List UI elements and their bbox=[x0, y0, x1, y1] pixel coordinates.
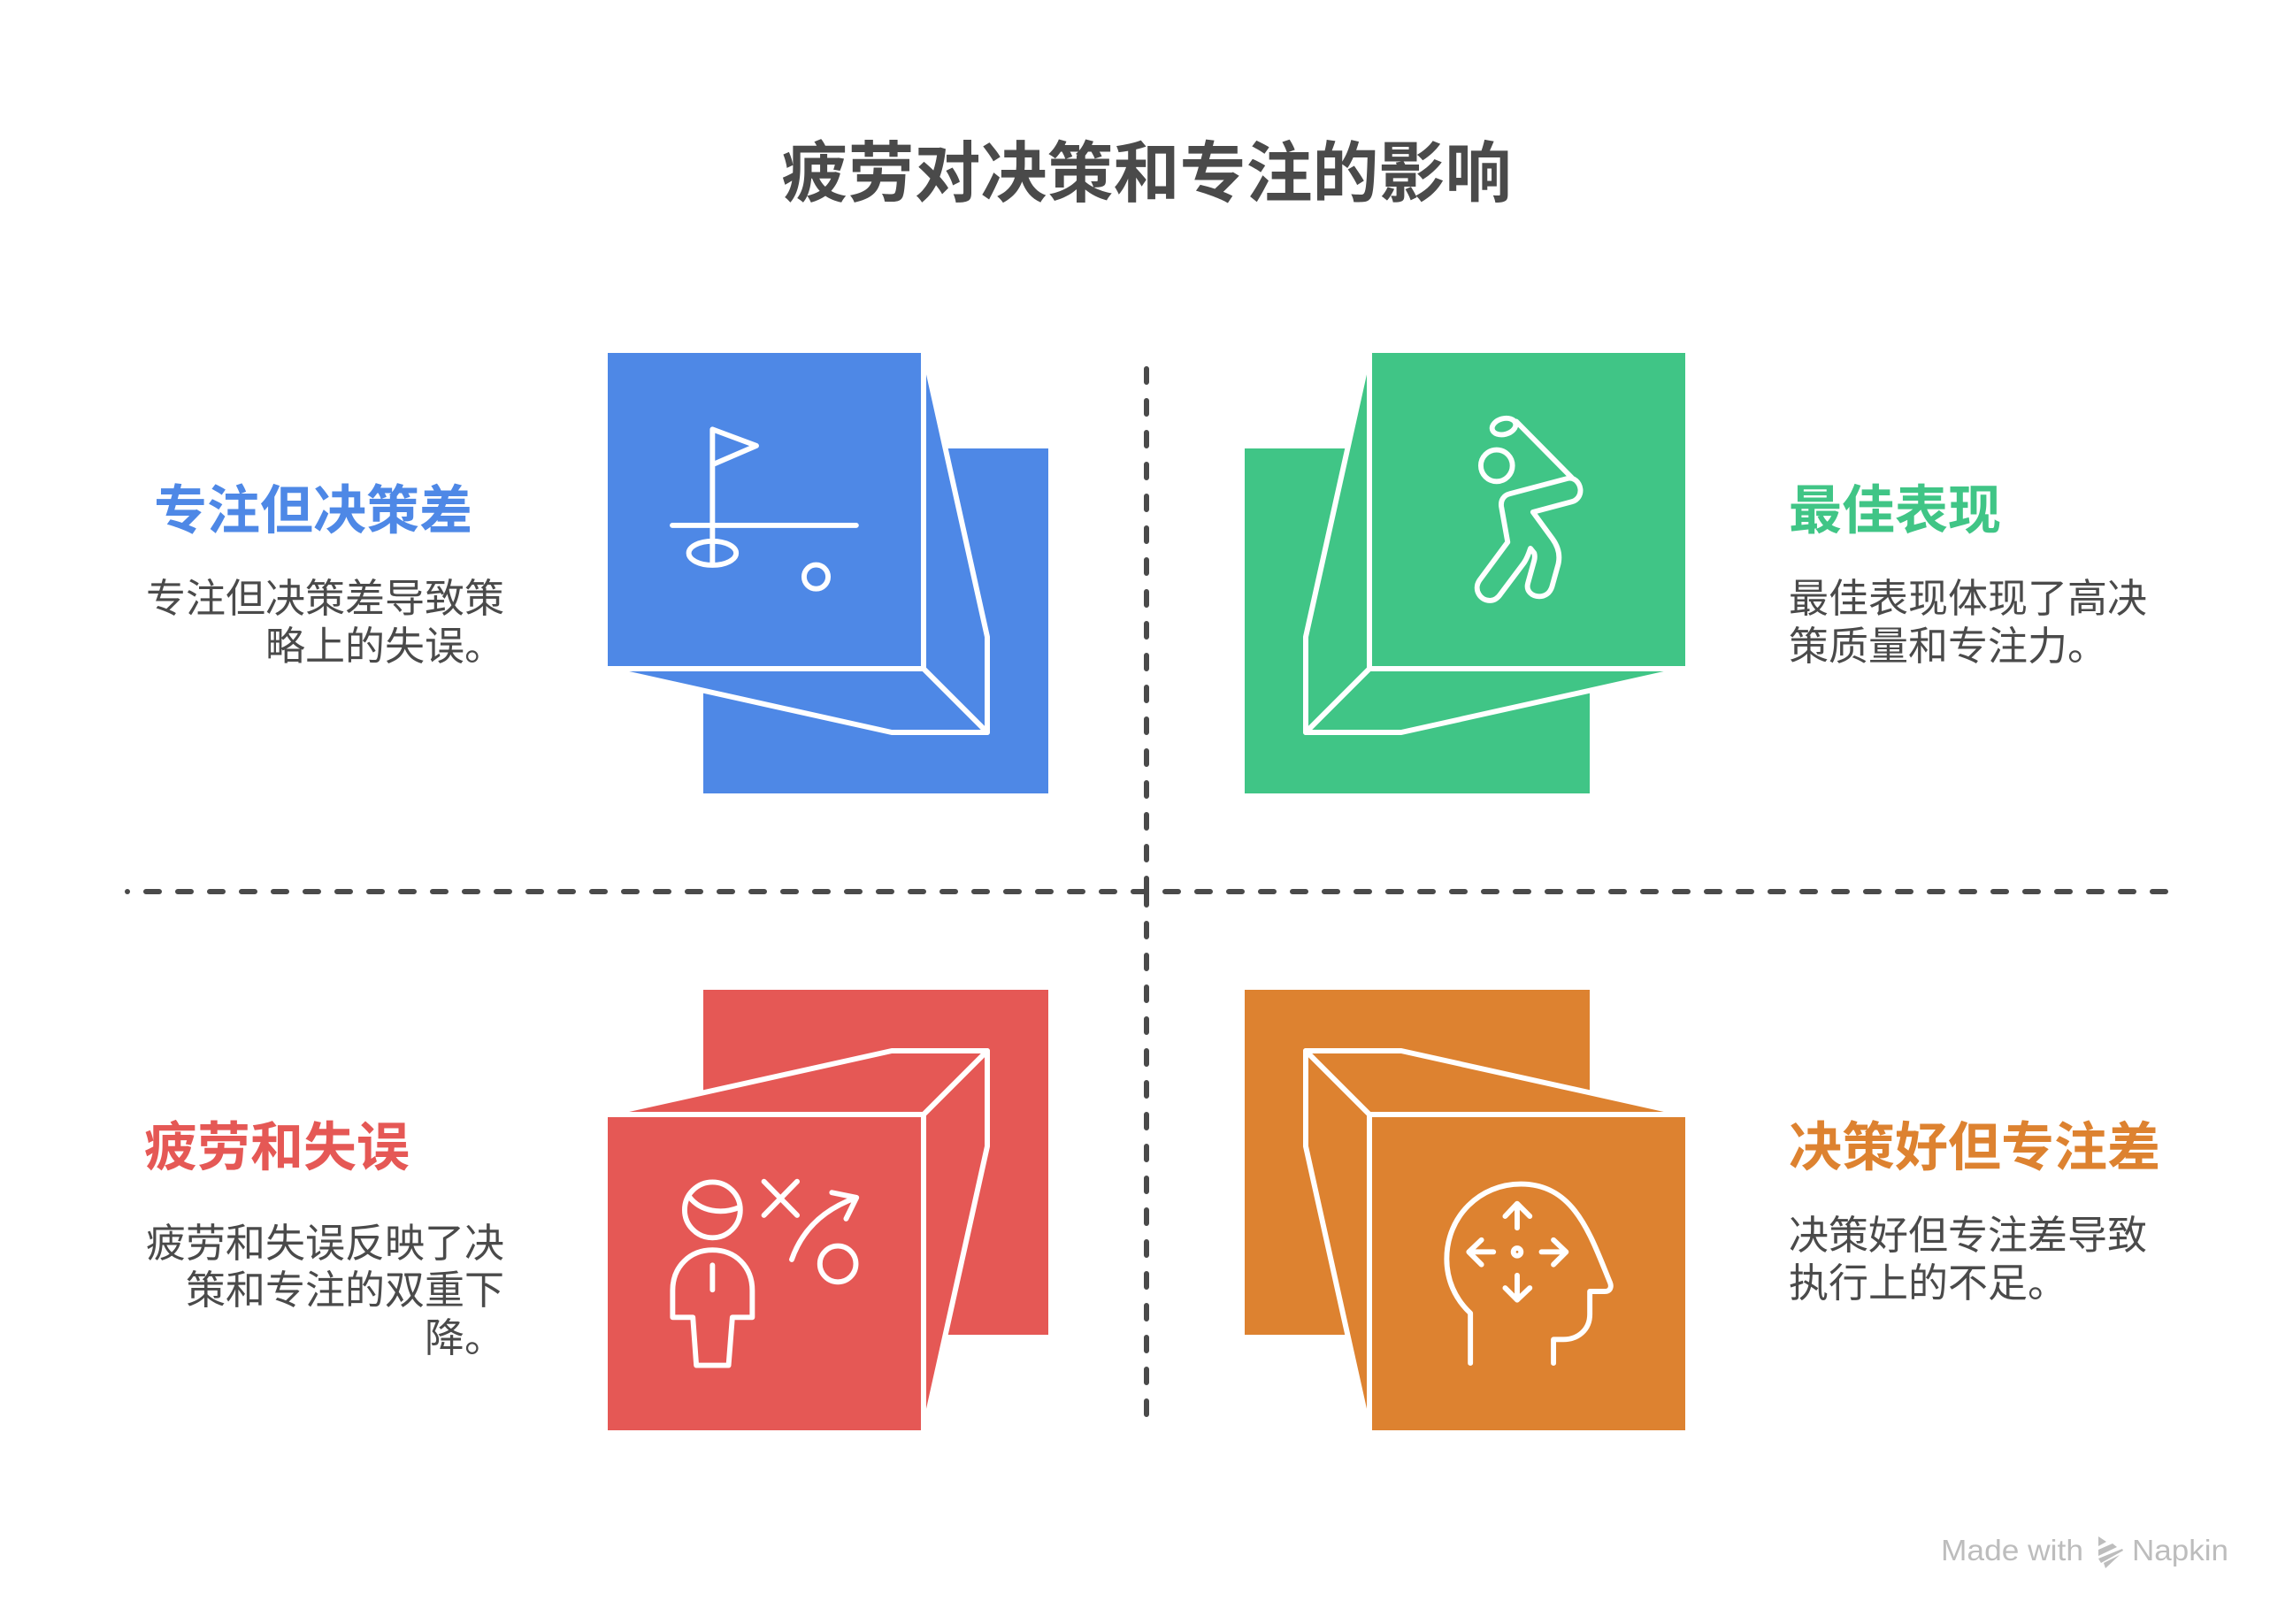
text block: red: 疲劳和失误反映了决 bbox=[146, 1221, 504, 1266]
title: 疲劳对决策和专注的影响 bbox=[781, 136, 1512, 211]
3D box: blue bbox=[605, 350, 1048, 793]
3D box: green bbox=[1245, 350, 1688, 793]
icon: strategy player bbox=[672, 1182, 856, 1366]
heading: green: 最佳表现 bbox=[1789, 481, 2001, 540]
text block: red: 策和专注的双重下 bbox=[186, 1268, 504, 1313]
panel: good decisions but poor focus (orange) bbox=[1245, 990, 2160, 1433]
heading: orange: 决策好但专注差 bbox=[1789, 1118, 2160, 1177]
text block: red bbox=[146, 1221, 504, 1360]
text block: green: 策质量和专注力。 bbox=[1789, 624, 2107, 669]
heading: red: 疲劳和失误 bbox=[144, 1118, 410, 1177]
icon: golf flag and ball bbox=[672, 429, 856, 589]
text block: orange: 执行上的不足。 bbox=[1789, 1260, 2067, 1306]
panel: best performance (green) bbox=[1245, 350, 2147, 793]
3D box: red bbox=[605, 990, 1048, 1433]
watermark: Made with Napkin bbox=[1941, 1534, 2228, 1568]
watermark: Made with Napkin: Napkin bbox=[2132, 1534, 2228, 1567]
text block: blue: 专注但决策差导致策 bbox=[146, 576, 504, 621]
panel: focused but poor decisions (blue) bbox=[146, 350, 1048, 793]
panel: fatigue and errors (red) bbox=[144, 990, 1048, 1433]
text block: blue bbox=[146, 576, 504, 669]
icon: head with arrows bbox=[1446, 1184, 1611, 1363]
text block: green: 最佳表现体现了高决 bbox=[1789, 576, 2147, 621]
quadrant dividers bbox=[125, 369, 2166, 1414]
text block: green bbox=[1789, 576, 2147, 669]
icon: Napkin logo bbox=[2098, 1536, 2123, 1568]
heading: blue: 专注但决策差 bbox=[154, 481, 472, 540]
text block: orange: 决策好但专注差导致 bbox=[1789, 1213, 2147, 1258]
3D box: orange bbox=[1245, 990, 1688, 1433]
text block: orange bbox=[1789, 1213, 2147, 1306]
icon: golfer swinging bbox=[1477, 416, 1581, 601]
watermark: Made with Napkin: Made with bbox=[1941, 1534, 2083, 1567]
text block: blue: 略上的失误。 bbox=[265, 624, 504, 669]
text block: red: 降。 bbox=[425, 1315, 504, 1360]
